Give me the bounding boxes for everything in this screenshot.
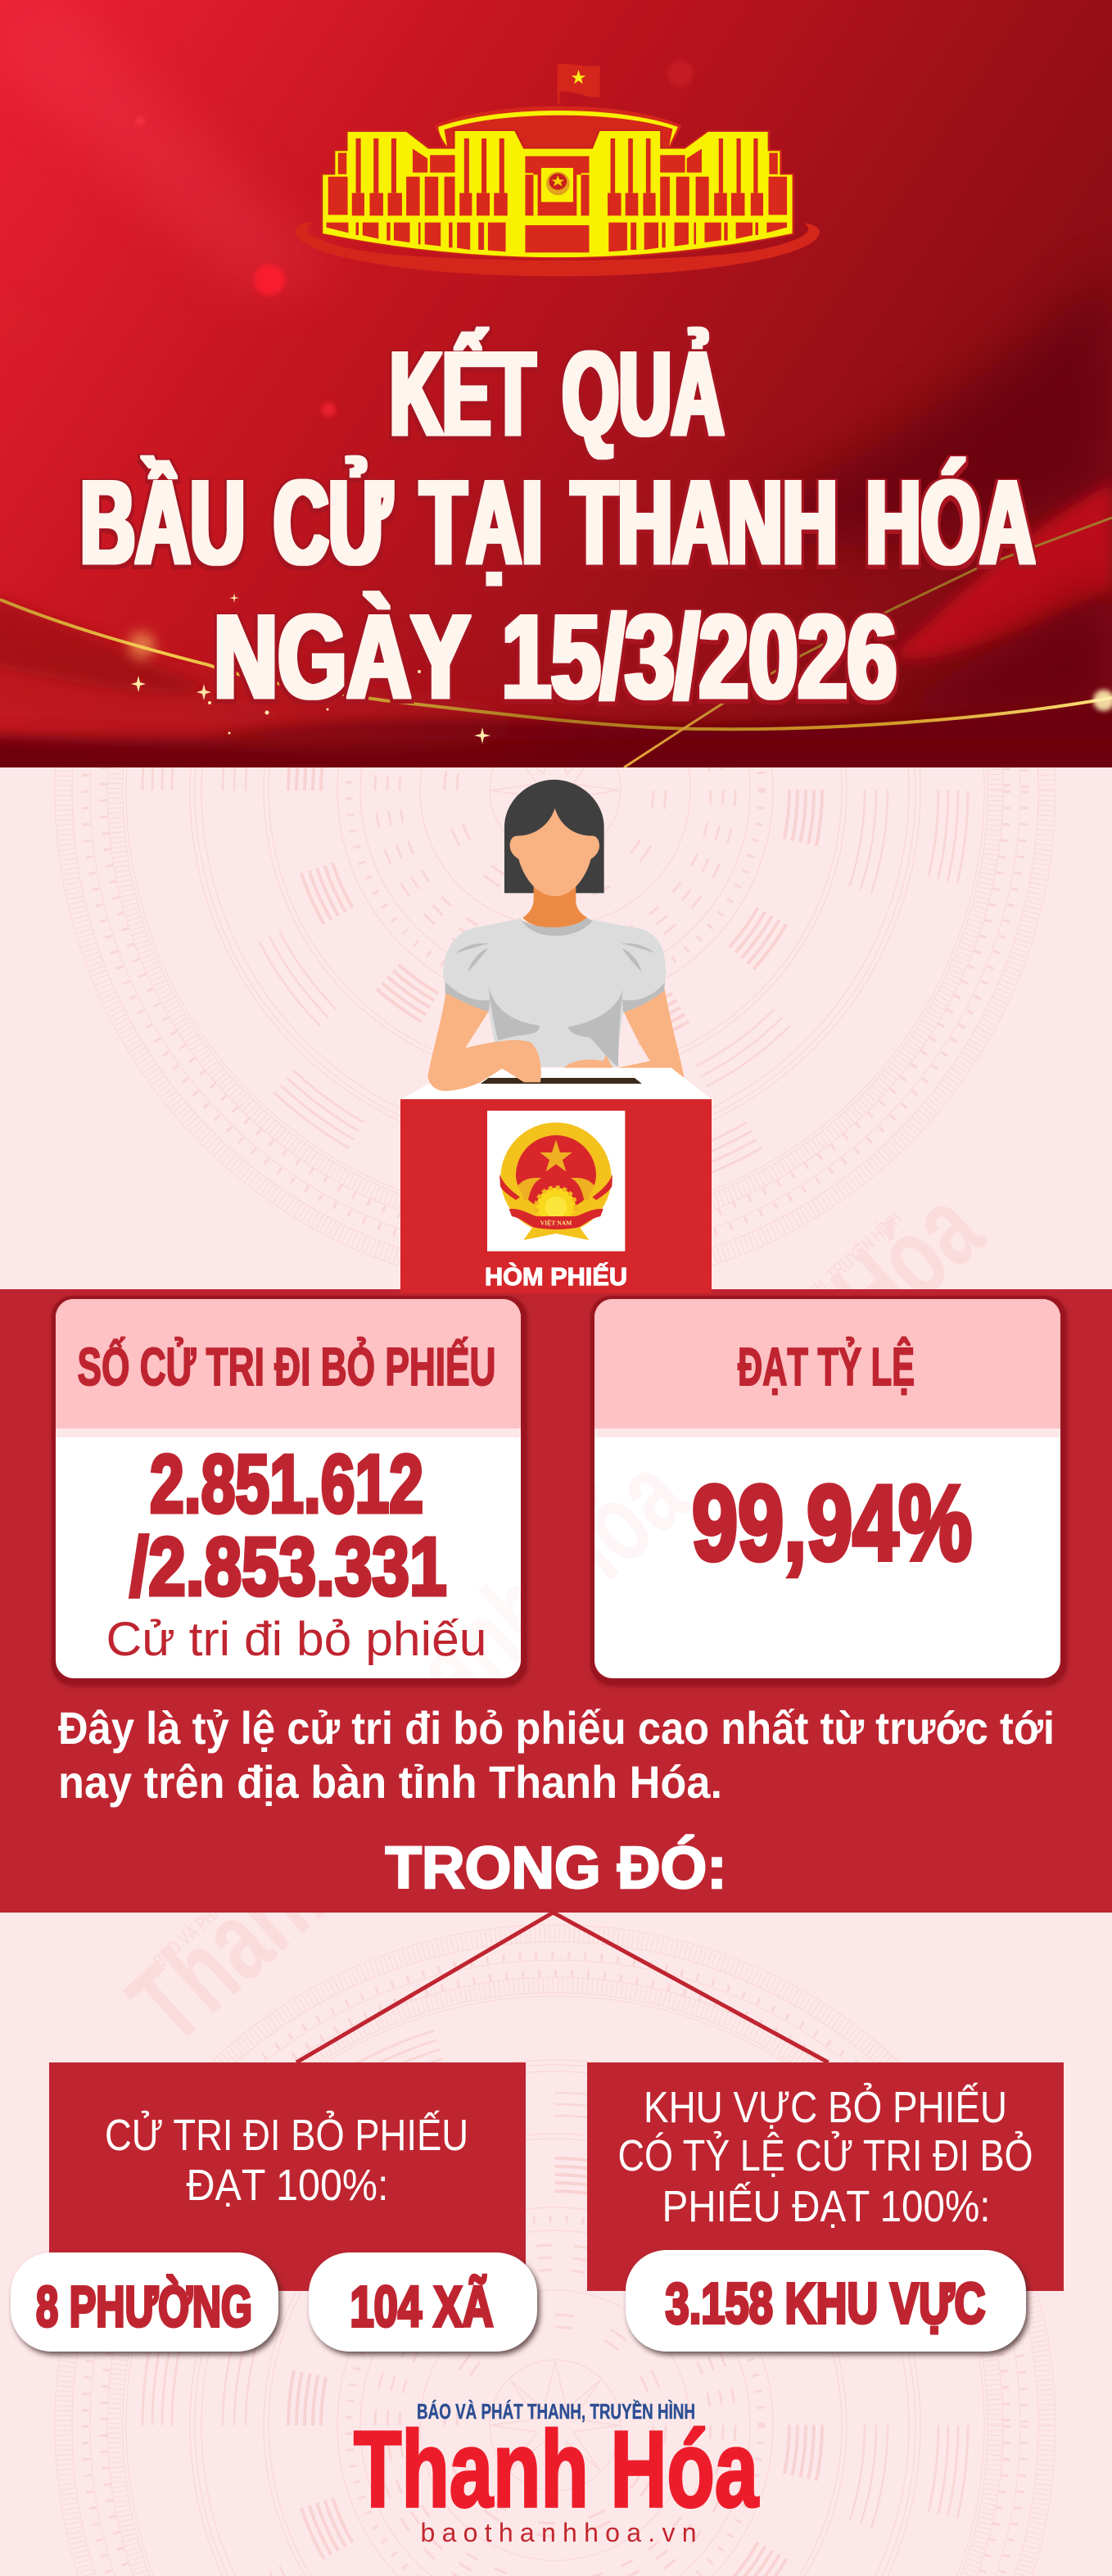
ballot box top — [400, 1068, 712, 1099]
pill text: 3.158 KHU VỰC — [665, 2271, 986, 2335]
background pattern: bronze drum lower — [0, 1913, 1112, 2576]
building body — [323, 131, 793, 257]
card header — [56, 1299, 521, 1428]
right hand — [563, 1055, 613, 1068]
icon: national assembly building — [295, 64, 820, 276]
emblem ribbon text: VIỆT NAM — [540, 1220, 572, 1227]
left forearm over box — [428, 1038, 541, 1091]
card header — [594, 1299, 1060, 1428]
box background — [587, 2062, 1064, 2291]
ballot slot — [481, 1078, 642, 1084]
logo tagline: BÁO VÀ PHÁT THANH, TRUYỀN HÌNH — [417, 2399, 695, 2424]
pill text: 8 PHƯỜNG — [36, 2275, 252, 2338]
card header strip — [594, 1428, 1060, 1437]
flag — [557, 64, 599, 104]
emblem gear — [536, 1188, 576, 1227]
card shadow — [52, 1296, 527, 1685]
box text line 2: ĐẠT 100%: — [187, 2161, 388, 2210]
watermark tagline: BÁO VÀ PHÁT THANH, TRUYỀN HÌNH — [148, 1791, 346, 1972]
background pattern: bronze drum upper — [0, 767, 1112, 1292]
watermark lower left — [106, 1700, 495, 2067]
connector lines — [296, 1913, 829, 2062]
logo: Thanh Hoa newspaper — [354, 2399, 759, 2547]
sparkles — [129, 593, 1112, 744]
box text line 3: PHIẾU ĐẠT 100%: — [662, 2182, 991, 2231]
logo wordmark: Thanh Hóa — [354, 2409, 759, 2529]
pill: communes — [309, 2252, 537, 2352]
shirt shading — [445, 917, 665, 1066]
emblem side ribbons — [499, 1174, 613, 1200]
emblem wreath — [500, 1122, 612, 1234]
card body — [56, 1299, 521, 1678]
hair — [504, 780, 604, 893]
number: total voters: /2.853.331 — [129, 1521, 447, 1613]
card caption: Cử tri đi bỏ phiếu — [106, 1613, 486, 1666]
center plaque — [541, 168, 573, 202]
emblem base fan — [523, 1226, 589, 1240]
title line 3: NGÀY 15/3/2026 — [214, 590, 897, 723]
red results band — [0, 1289, 1112, 1913]
box text line 1: CỬ TRI ĐI BỎ PHIẾU — [105, 2111, 468, 2160]
neck — [522, 879, 587, 929]
national emblem plaque — [487, 1111, 625, 1252]
box background — [49, 2062, 526, 2291]
emblem rice stalks — [518, 1178, 595, 1200]
illustration: voter — [400, 780, 712, 1099]
statement text — [58, 1702, 1055, 1808]
box lower edge over band — [400, 1289, 712, 1293]
heading: trong do: TRONG ĐÓ: — [385, 1835, 727, 1901]
emblem bottom ribbon — [509, 1209, 603, 1229]
box text line 2: CÓ TỶ LỆ CỬ TRI ĐI BỎ — [617, 2131, 1033, 2180]
pill: polling areas — [626, 2250, 1026, 2352]
panel: polling areas 100 percent — [587, 2062, 1064, 2352]
emblem red disc — [516, 1135, 596, 1206]
right arm — [617, 986, 685, 1077]
pill text: 104 XÃ — [350, 2275, 493, 2338]
card body — [594, 1299, 1060, 1678]
center pillars — [525, 173, 590, 215]
number: voters: 2.851.612 — [150, 1438, 423, 1530]
gold curve — [0, 600, 1112, 729]
ballot box front — [400, 1099, 712, 1294]
box text line 1: KHU VỰC BỎ PHIẾU — [644, 2083, 1007, 2132]
card header strip — [56, 1428, 521, 1437]
title — [80, 327, 1035, 723]
statement line 2: nay trên địa bàn tỉnh Thanh Hóa. — [58, 1756, 722, 1808]
number: turnout rate: 99,94% — [692, 1463, 972, 1582]
card watermark: Thanh Hóa — [319, 1431, 709, 1800]
card heading: SỐ CỬ TRI ĐI BỎ PHIẾU — [77, 1337, 496, 1397]
emblem star — [540, 1140, 572, 1171]
header banner — [0, 0, 1112, 819]
watermark lower left: Thanh Hóa — [106, 1700, 495, 2067]
gold rising line — [624, 518, 1112, 767]
ballot box label: HÒM PHIẾU — [485, 1261, 627, 1291]
left arm — [428, 989, 541, 1091]
base swoosh — [295, 222, 820, 276]
card heading: ĐẠT TỶ LỆ — [738, 1337, 915, 1397]
face — [510, 808, 599, 896]
watermark tagline: BÁO VÀ PHÁT THANH, TRUYỀN HÌNH — [708, 1207, 906, 1388]
shirt — [443, 919, 666, 1066]
logo url: baothanhhoa.vn — [421, 2518, 696, 2547]
watermark upper right — [616, 1165, 1006, 1533]
roof dome — [435, 106, 681, 150]
panel: voters 100 percent — [11, 2062, 537, 2352]
card shadow — [590, 1296, 1066, 1685]
panel: voters card — [52, 1296, 709, 1800]
panel: rate card — [319, 1296, 1066, 1800]
pill: wards — [11, 2252, 278, 2352]
decorative glow dots — [0, 61, 694, 417]
title line 1: KẾT QUẢ — [390, 327, 724, 460]
windows — [327, 138, 787, 252]
card watermark: Thanh Hóa — [319, 1431, 709, 1800]
